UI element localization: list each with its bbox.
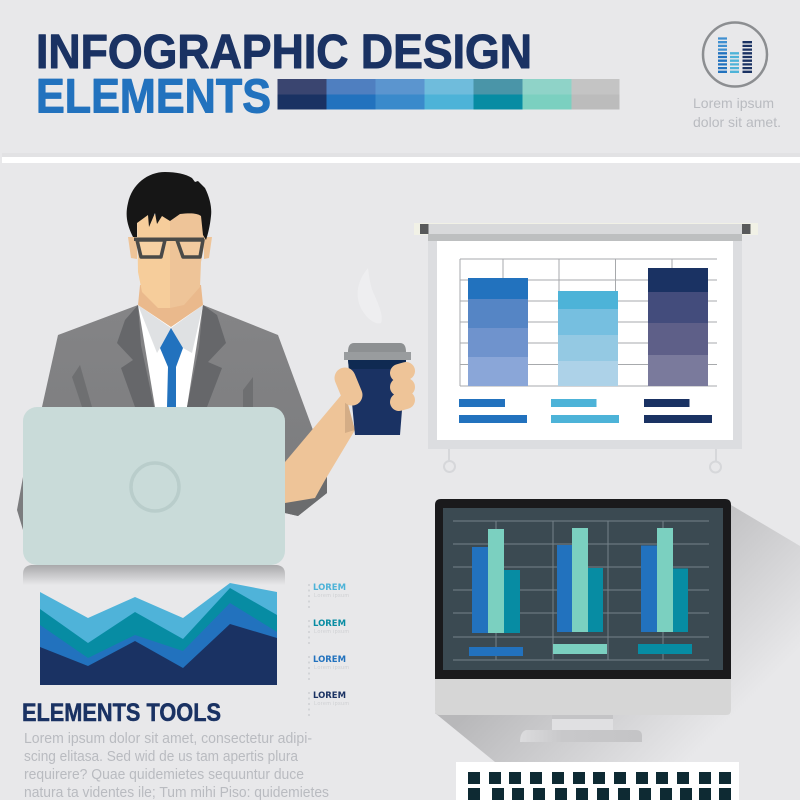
chart legend [308,583,349,716]
screen grid [453,521,709,660]
bar: cyan stack [558,291,618,386]
glasses [134,238,204,257]
steam [358,268,382,323]
face [137,213,205,308]
keyboard [456,762,739,800]
coffee cup [344,343,411,435]
legend labels: LOREM [313,691,346,701]
legend labels: LOREM [313,655,346,665]
legend labels [313,583,346,701]
board surface [437,241,733,440]
board frame [428,238,742,449]
laptop shadow [23,565,285,585]
presentation board [414,223,758,472]
cup lid [348,343,406,352]
header band divider [2,153,800,163]
body text: requirere? Quae quidemietes sequuntur duce [24,766,304,783]
legend labels: LOREM [313,583,346,593]
shirt [138,305,203,407]
monitor [435,499,731,742]
sleeve cuff [285,477,327,516]
body text: scing elitasa. Sed wid de us tam apertis plura [24,748,299,765]
cup band [348,360,406,369]
shirt collar [138,305,203,353]
roller [414,223,758,241]
icon caption: dolor sit amet. [693,114,781,130]
legend sublabels: Lorem ipsum [314,701,349,707]
jacket folds [72,365,253,407]
icon caption [693,95,781,130]
screen bars group 2 [557,528,603,632]
keys row 2 [468,788,731,800]
monitor stand [520,715,642,742]
arm [285,393,355,503]
icon caption: Lorem ipsum [693,95,774,111]
ears [128,237,212,259]
necktie [160,328,183,407]
monitor long shadow [435,505,800,800]
neck [138,285,203,327]
laptop logo [131,463,179,511]
laptop [23,407,285,565]
colour palette strip [278,79,620,110]
screen bars group 1 [472,529,520,633]
title: INFOGRAPHIC DESIGN [36,26,532,79]
screen bars group 3 [641,528,688,632]
keys row 1 [468,772,731,784]
jacket [17,305,327,530]
businessman figure [17,172,327,530]
title: ELEMENTS [36,70,271,124]
bar: blue stack [468,278,528,386]
section heading: ELEMENTS TOOLS [22,699,221,727]
legend sublabels [314,593,349,707]
lid rim [344,352,411,360]
board legend bars [459,399,712,423]
monitor bezel [435,499,731,679]
area chart [40,583,277,685]
monitor chin [435,679,731,715]
legend sublabels: Lorem ipsum [314,629,349,635]
bar: navy stack [648,268,708,386]
board grid [460,259,717,386]
cup body [348,360,406,435]
legend sublabels: Lorem ipsum [314,593,349,599]
legend sublabels: Lorem ipsum [314,665,349,671]
arm shade [345,393,355,433]
legend dots [308,584,310,716]
hair [127,172,211,240]
monitor screen [443,508,723,670]
hand fingers [345,371,406,402]
legend labels: LOREM [313,619,346,629]
title [36,26,532,124]
lapels [117,305,226,407]
icon: equalizer badge [703,22,767,86]
body text: Lorem ipsum dolor sit amet, consectetur adipi- [24,730,312,747]
body text [24,730,329,800]
screen legend bars [469,644,692,656]
board legs [444,449,721,472]
